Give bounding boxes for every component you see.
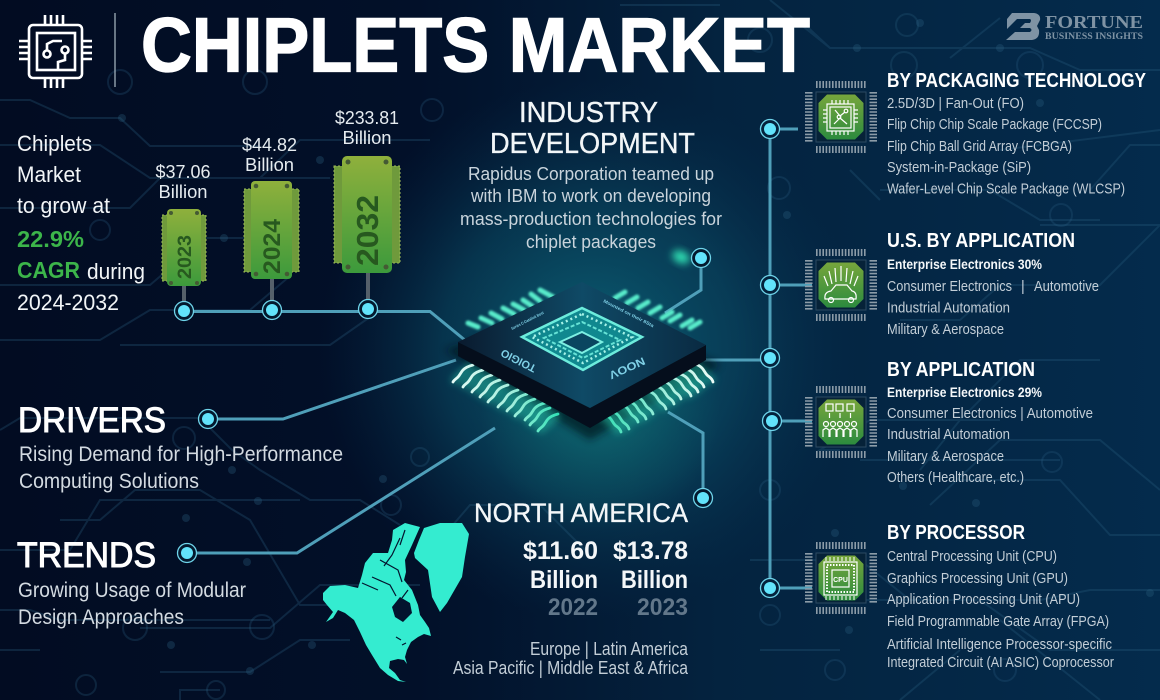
lower pins right (600, 363, 713, 432)
text: other regions (453, 639, 689, 678)
connectors around central chip (187, 128, 812, 588)
text: drivers description (19, 443, 343, 493)
value label: 2032: Billion (342, 128, 392, 148)
icon: CPU chip: CPU (833, 577, 848, 584)
heading: drivers: DRIVERS (18, 401, 166, 440)
market growth statement: during (87, 259, 145, 284)
node: processor (760, 578, 780, 598)
Canada, USA, Mexico (323, 523, 431, 682)
text: industry development description (460, 163, 722, 252)
node: U.S. application (760, 276, 780, 294)
text: U.S. by application (887, 230, 1099, 338)
chip markings: Series C-Datalink Best (510, 310, 545, 331)
text: industry development description: mass-production technologies for (460, 208, 722, 229)
text: by packaging technology: Wafer-Level Chip Scale Package (WLCSP) (887, 182, 1125, 198)
node: packaging (760, 120, 780, 138)
stat: North America 2022: $11.60 (523, 537, 598, 565)
text: by processor: Application Processing Unit (APU) (887, 592, 1080, 608)
heading: industry development: INDUSTRY (519, 97, 658, 129)
text: by application: Enterprise Electronics 29% (887, 384, 1042, 400)
stat: North America 2023: $13.78 (613, 537, 688, 565)
text: drivers description: Computing Solutions (19, 470, 199, 493)
heading: North America: NORTH AMERICA (474, 498, 688, 528)
glow spot near top node (670, 248, 692, 266)
text: by packaging technology: Flip Chip Ball Grid Array (FCBGA) (887, 139, 1072, 155)
logo: Fortune Business Insights (1006, 12, 1144, 42)
title: CHIPLETS MARKET (141, 2, 810, 88)
stat: North America 2022 (523, 537, 598, 621)
text: by packaging technology (887, 70, 1147, 198)
bar chip: 2024 (244, 181, 299, 303)
text: trends description: Growing Usage of Modular (18, 579, 246, 602)
text: trends description: Design Approaches (18, 606, 184, 629)
node: application (762, 412, 782, 430)
text: by processor: Central Processing Unit (CPU) (887, 549, 1057, 565)
icon: CPU chip (808, 546, 874, 610)
bar chip: 2024: 2024 (259, 218, 286, 274)
node: 2023 (174, 302, 194, 320)
text: by application (887, 359, 1093, 486)
value label: 2024: $44.82 (242, 135, 297, 155)
node: 2032 (358, 300, 378, 318)
text: industry development description: with IBM to work on developing (470, 185, 711, 206)
text: drivers description: Rising Demand for High-Performance (19, 443, 343, 466)
value label: 2032: $233.81 (335, 108, 399, 128)
text: other regions: Asia Pacific | Middle East & Africa (453, 658, 689, 678)
stat: North America 2023 (613, 537, 688, 621)
text: U.S. by application: Industrial Automation (887, 300, 1010, 316)
lower pins (453, 365, 558, 431)
connector: market sizes to central chip (184, 312, 466, 341)
stat: North America 2023: 2023 (637, 594, 688, 621)
stat: North America 2022: 2022 (548, 594, 598, 621)
text: trends description (18, 579, 246, 629)
node: 2024 (262, 300, 282, 320)
value label: 2023: Billion (158, 182, 208, 202)
text: by packaging technology: System-in-Package (SiP) (887, 160, 1031, 176)
text: by processor (887, 522, 1114, 671)
map: North America (323, 523, 469, 682)
text: by application: BY APPLICATION (887, 359, 1035, 381)
text: by processor: Graphics Processing Unit (GPU) (887, 571, 1068, 587)
heading: industry development (490, 97, 695, 160)
upper pins (468, 290, 700, 328)
stat: North America 2023: Billion (621, 566, 688, 594)
Hudson Bay and inland waters (392, 597, 412, 622)
value label: 2024 (242, 135, 297, 175)
node: North America (694, 488, 712, 508)
text: U.S. by application: Enterprise Electronics 30% (887, 256, 1042, 272)
text: by processor: BY PROCESSOR (887, 522, 1025, 544)
bar chip: 2023: 2023 (175, 235, 196, 279)
text: U.S. by application: Consumer Electronics (887, 279, 1012, 295)
node: central top (692, 248, 710, 268)
text: other regions: Europe | Latin America (530, 639, 689, 659)
text: U.S. by application: Military & Aerospace (887, 322, 1004, 338)
market growth statement: CAGR (17, 257, 80, 283)
market growth statement: Chiplets (17, 131, 92, 156)
icon: packaging chip (808, 84, 874, 150)
text: U.S. by application: U.S. BY APPLICATION (887, 230, 1075, 252)
chip markings (499, 298, 655, 381)
bar chip: 2032: 2032 (350, 195, 385, 266)
text: by processor: Integrated Circuit (AI ASIC) Coprocessor (887, 655, 1114, 671)
logo: Fortune Business Insights: BUSINESS INSIGHTS (1045, 31, 1144, 42)
icon: application chip (808, 390, 874, 454)
text: by processor: Artificial Intelligence Processor-specific (887, 637, 1112, 653)
text: by packaging technology: Flip Chip Chip Scale Package (FCCSP) (887, 117, 1102, 133)
text: U.S. by application: | (1021, 279, 1025, 295)
value label: 2023 (156, 162, 210, 202)
text: by application: Others (Healthcare, etc.) (887, 470, 1024, 486)
Greenland (414, 523, 469, 612)
heading: industry development: DEVELOPMENT (490, 128, 695, 160)
chip markings: Mounted on their 8Sta (603, 298, 655, 329)
chip markings: NOOV (606, 354, 647, 381)
text: industry development description: Rapidus Corporation teamed up (468, 163, 714, 184)
market growth statement: Market (17, 162, 81, 187)
chip package (458, 342, 706, 428)
text: by application: Consumer Electronics | Automotive (887, 406, 1093, 422)
chip markings: TOIGIO (499, 346, 538, 374)
icon: automotive chip (808, 252, 874, 318)
market growth statement: 2024-2032 (17, 290, 119, 315)
node: drivers (198, 410, 218, 428)
lower pins glow (453, 363, 713, 432)
die pattern (522, 308, 642, 370)
text: U.S. by application: Automotive (1034, 279, 1099, 295)
value label: 2023: $37.06 (156, 162, 210, 182)
text: by processor: Field Programmable Gate Array (FPGA) (887, 614, 1109, 630)
Arctic channels (362, 530, 408, 645)
market growth statement: 22.9% (17, 226, 84, 252)
text: by application: Military & Aerospace (887, 449, 1004, 465)
market growth statement (17, 131, 145, 315)
node: trends (178, 544, 196, 562)
value label: 2024: Billion (245, 155, 294, 175)
logo: Fortune Business Insights: FORTUNE (1045, 12, 1143, 32)
value label: 2032 (335, 108, 399, 148)
central chip (445, 282, 720, 440)
stat: North America 2022: Billion (530, 566, 598, 594)
bar chip: 2023 (162, 209, 206, 305)
heading: trends: TRENDS (17, 536, 156, 575)
chip shadow (445, 300, 720, 440)
header chip icon (19, 15, 92, 88)
market growth statement: to grow at (17, 193, 110, 218)
node: central right (760, 348, 780, 368)
header divider (114, 13, 116, 87)
bar chip: 2032 (334, 156, 400, 301)
text: by application: Industrial Automation (887, 427, 1010, 443)
text: by packaging technology: 2.5D/3D | Fan-Out (FO) (887, 96, 1024, 112)
text: industry development description: chiplet packages (526, 231, 656, 252)
